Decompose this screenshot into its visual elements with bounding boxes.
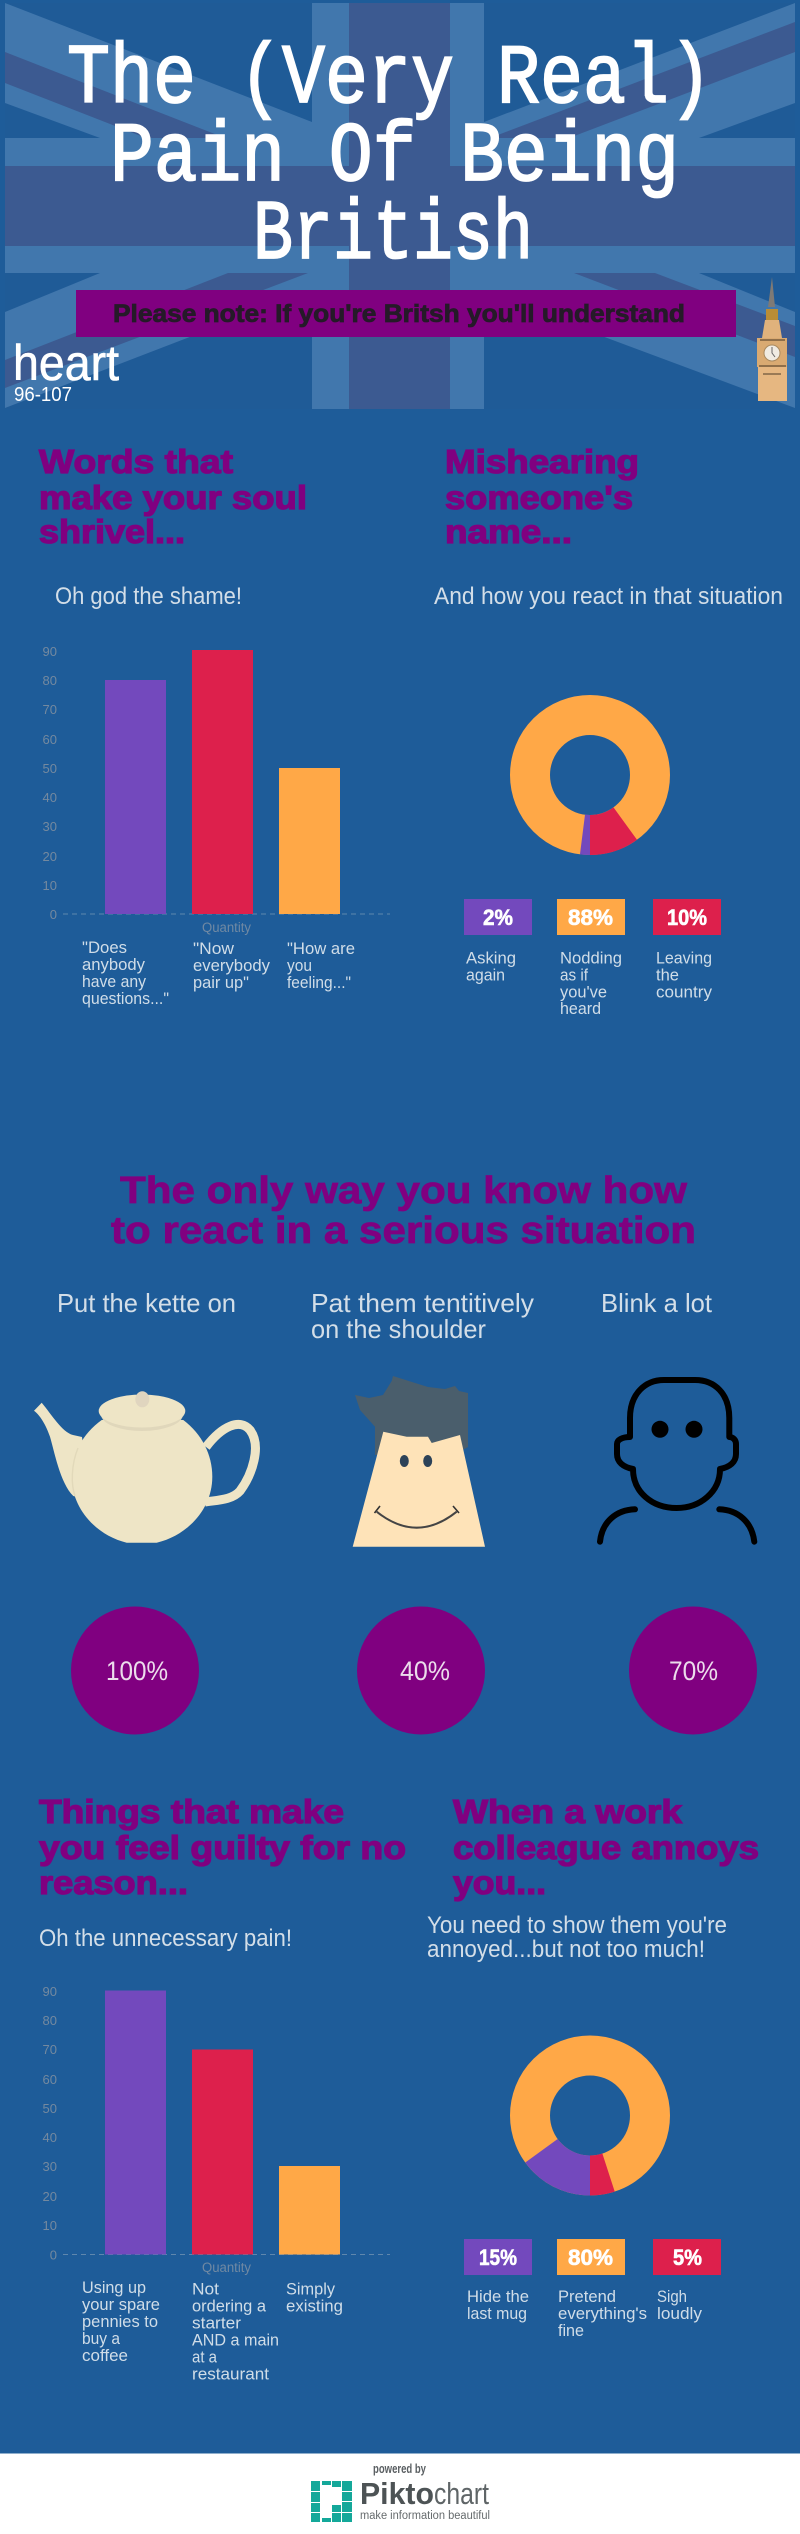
legend: 15%	[479, 2245, 517, 2270]
legend: Hide the	[467, 2287, 529, 2306]
panel: how to react in a serious situation	[34, 1170, 757, 1734]
heading: you feel guilty for no	[39, 1829, 406, 1866]
logo: heart 96-107: heart	[13, 335, 119, 391]
legend: Nodding	[560, 948, 622, 968]
heading: shrivel...	[39, 513, 185, 550]
donut chart	[530, 715, 650, 855]
legend: everything's	[558, 2304, 647, 2323]
legend: Leaving	[656, 948, 712, 968]
heading: name...	[445, 513, 572, 550]
wordmark: Pikto	[360, 2476, 434, 2511]
stat circle: 70%: 70%	[669, 1656, 718, 1686]
bar chart: 30	[43, 2159, 57, 2174]
heading	[39, 1793, 406, 1901]
bar labels: you	[287, 956, 312, 975]
heading: colleague annoys	[453, 1829, 759, 1866]
bar labels: AND a main	[192, 2330, 279, 2350]
note banner: Please note: If you're Britsh you'll understand	[113, 300, 685, 328]
bar chart: 30	[43, 819, 57, 834]
heading: reason...	[39, 1864, 188, 1901]
bar labels: everybody	[193, 956, 270, 975]
bar chart: 80	[43, 2013, 57, 2028]
legend: country	[656, 982, 713, 1002]
bar chart: Quantity	[202, 2260, 251, 2275]
legend: 80%	[568, 2245, 613, 2270]
bar labels: questions..."	[82, 989, 169, 1008]
stat circle: 40%	[357, 1606, 485, 1734]
bar labels: have any	[82, 972, 146, 991]
legend: 5%	[673, 2245, 702, 2270]
legend: Asking	[466, 948, 516, 968]
bar labels	[82, 938, 355, 1008]
bar labels: existing	[286, 2296, 343, 2316]
bar labels: pennies to	[82, 2312, 158, 2331]
subheading: Oh god the shame!	[55, 583, 242, 610]
bar labels: Simply	[286, 2280, 335, 2298]
bar labels: starter	[192, 2314, 241, 2332]
bar labels: pair up"	[193, 973, 249, 992]
panel: header with union flag	[5, 3, 795, 409]
subheading: annoyed...but not too much!	[427, 1936, 705, 1963]
legend: 10%	[667, 905, 707, 930]
bar chart: 40	[43, 2130, 57, 2145]
bar chart	[43, 1984, 390, 2275]
legend: you've	[560, 982, 607, 1002]
legend	[464, 2239, 721, 2340]
bar chart: 20	[43, 849, 57, 864]
bar chart: 90	[43, 644, 57, 659]
bar chart: 0	[50, 2248, 57, 2262]
bar labels	[82, 2278, 343, 2384]
bar chart: 80	[43, 673, 57, 688]
panel: mishearing someone's name	[434, 443, 783, 1018]
heading	[111, 1170, 696, 1252]
heading	[39, 443, 307, 550]
wordmark: make information beautiful	[360, 2510, 490, 2522]
subheading: You need to show them you're	[427, 1912, 727, 1939]
legend: Sigh	[657, 2287, 687, 2306]
title	[67, 33, 712, 284]
note banner	[76, 290, 736, 337]
legend: loudly	[657, 2304, 703, 2323]
column captions: on the shoulder	[311, 1314, 486, 1344]
bar labels: "Does	[82, 938, 127, 957]
column captions: Pat them tentitively	[311, 1288, 534, 1318]
legend: heard	[560, 999, 601, 1018]
bar labels: Not	[192, 2280, 219, 2298]
heading: Mishearing	[445, 443, 639, 480]
icon: Big Ben	[757, 277, 787, 401]
legend: Pretend	[558, 2287, 616, 2306]
title: British	[253, 189, 533, 284]
bar chart: 10	[43, 2218, 57, 2233]
bar chart: 60	[43, 2072, 57, 2087]
bar labels: restaurant	[192, 2364, 269, 2384]
wordmark	[360, 2476, 490, 2522]
heading: Things that make	[39, 1793, 344, 1830]
heading: Words that	[39, 443, 233, 480]
powered by: powered by	[373, 2461, 427, 2476]
heading	[445, 443, 639, 550]
legend: fine	[558, 2321, 584, 2340]
legend: 88%	[568, 905, 613, 930]
bar chart: 70	[43, 702, 57, 717]
bar labels: your spare	[82, 2295, 160, 2314]
title: Pain Of Being	[110, 111, 679, 206]
bar chart: 50	[43, 2101, 57, 2116]
panel: footer	[0, 2454, 800, 2534]
subheading: Oh the unnecessary pain!	[39, 1925, 292, 1952]
panel: words that make your soul shrivel	[39, 443, 390, 1008]
column captions: Put the kette on	[57, 1288, 236, 1318]
subheading: And how you react in that situation	[434, 583, 783, 610]
bar chart: 20	[43, 2189, 57, 2204]
bar labels: "Now	[193, 939, 235, 958]
union flag background	[5, 3, 795, 409]
subheading	[427, 1912, 727, 1963]
bar chart: 10	[43, 878, 57, 893]
panel: things that make you feel guilty	[39, 1793, 406, 2384]
legend: the	[656, 966, 679, 984]
heading: to react in a serious situation	[111, 1210, 696, 1252]
bar chart: 50	[43, 761, 57, 776]
legend: last mug	[467, 2304, 527, 2323]
bar chart: 40	[43, 790, 57, 805]
heading: The only way you know how	[120, 1170, 687, 1212]
legend: 2%	[483, 905, 513, 930]
wordmark: chart	[434, 2476, 489, 2511]
legend: again	[466, 966, 505, 984]
bar chart: Quantity	[202, 920, 251, 935]
bar chart: 0	[50, 907, 57, 922]
icon: smiling man	[353, 1376, 485, 1547]
bar labels: "How are	[287, 939, 355, 958]
bar labels: anybody	[82, 955, 145, 974]
column captions: Blink a lot	[601, 1288, 713, 1318]
column captions	[57, 1288, 713, 1344]
heading	[453, 1793, 759, 1901]
icon: Piktochart logo	[311, 2481, 352, 2522]
stat circle: 100%	[71, 1606, 199, 1734]
bar labels: feeling..."	[287, 973, 351, 992]
panel: when a work colleague annoys you	[427, 1793, 759, 2340]
donut chart	[525, 2056, 650, 2196]
bar labels: at a	[192, 2348, 217, 2366]
icon: person outline	[600, 1380, 754, 1542]
bar chart: 70	[43, 2042, 57, 2057]
stat circle: 40%: 40%	[400, 1656, 450, 1686]
bar labels: coffee	[82, 2346, 128, 2365]
stat circle: 70%	[629, 1606, 757, 1734]
bar chart: 90	[43, 1984, 57, 1999]
bar chart	[43, 644, 390, 935]
heading: someone's	[445, 479, 633, 516]
legend	[464, 899, 721, 1018]
legend: as if	[560, 966, 588, 984]
bar labels: ordering a	[192, 2296, 267, 2316]
bar labels: buy a	[82, 2329, 120, 2348]
heading: When a work	[453, 1793, 683, 1830]
logo: heart 96-107: 96-107	[14, 384, 72, 406]
stat circle: 100%: 100%	[106, 1656, 168, 1686]
bar chart: 60	[43, 732, 57, 747]
icon: teapot	[34, 1391, 255, 1543]
bar labels: Using up	[82, 2278, 146, 2297]
heading: you...	[453, 1864, 546, 1901]
heading: make your soul	[39, 479, 307, 516]
